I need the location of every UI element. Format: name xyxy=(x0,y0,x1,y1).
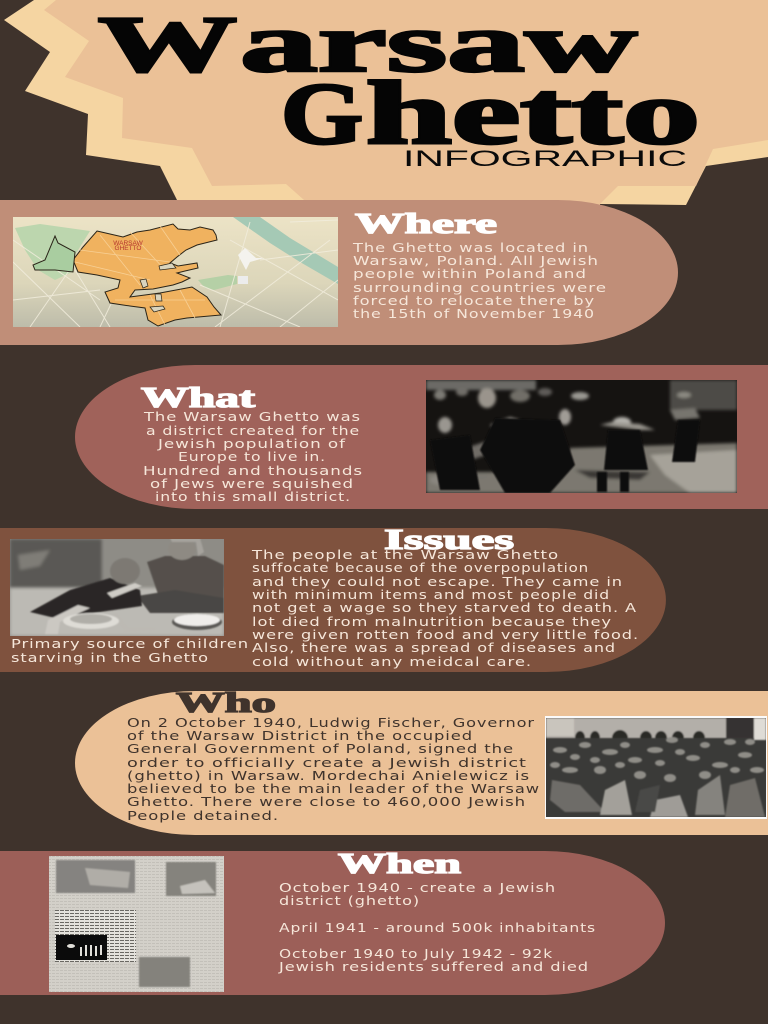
panel: what xyxy=(75,365,768,509)
text: issues: not get a wage so they starved to death. A xyxy=(252,600,637,615)
text: when timeline: April 1941 - around 500k inhabitants xyxy=(279,920,596,935)
text: when timeline: district (ghetto) xyxy=(279,893,420,908)
text: when timeline: Jewish residents suffered and died xyxy=(278,959,589,974)
panel: when xyxy=(0,849,665,995)
text: who: People detained. xyxy=(127,808,279,823)
panel: where xyxy=(0,200,678,345)
title xyxy=(98,0,700,171)
text: who: order to officially create a Jewish district xyxy=(127,755,527,770)
caption: primary source: Primary source of children xyxy=(11,636,249,651)
heading: issues: Issues xyxy=(384,525,514,556)
text: what: Jewish population of xyxy=(157,436,346,451)
text: what: Europe to live in. xyxy=(178,449,326,464)
text: issues: and they could not escape. They came in xyxy=(252,574,623,589)
map of the Warsaw Ghetto xyxy=(13,217,338,327)
text: where: forced to relocate there by xyxy=(353,293,595,308)
photo: starving children xyxy=(10,538,224,636)
text: where: Warsaw, Poland. All Jewish xyxy=(353,253,599,268)
text: where: The Ghetto was located in xyxy=(352,240,589,255)
ghetto district outline xyxy=(73,224,221,326)
header starburst: inner shape xyxy=(44,0,768,210)
text: who: On 2 October 1940, Ludwig Fischer, Governor xyxy=(127,715,535,730)
heading: what: What xyxy=(141,383,256,414)
text: where: surrounding countries were xyxy=(353,280,607,295)
text: issues: Also, there was a spread of diseases and xyxy=(252,640,616,655)
text: issues: were given rotten food and very little food. xyxy=(252,627,639,642)
text: issues: cold without any meidcal care. xyxy=(252,654,532,669)
text: who: General Government of Poland, signed the xyxy=(127,741,514,756)
map of the Warsaw Ghetto: GHETTO xyxy=(115,245,141,252)
text: issues xyxy=(251,547,639,669)
text: issues: lot died from malnutrition because they xyxy=(252,614,612,629)
caption: primary source: starving in the Ghetto xyxy=(11,650,209,665)
heading: where: Where xyxy=(355,208,497,240)
text: what xyxy=(143,409,363,504)
text: where xyxy=(352,240,607,321)
title: INFOGRAPHIC xyxy=(403,146,687,171)
text: who: believed to be the main leader of the Warsaw xyxy=(127,781,540,796)
panel: who xyxy=(75,688,768,835)
title: hetto xyxy=(366,64,700,163)
heading: when: When xyxy=(338,849,462,880)
header starburst: outer light shape xyxy=(4,0,768,210)
text: when timeline xyxy=(278,880,596,974)
text: issues: with minimum items and most people did xyxy=(252,587,610,602)
title: G xyxy=(281,66,363,163)
title: W xyxy=(98,1,237,89)
text: who: of the Warsaw District in the occupied xyxy=(127,728,473,743)
photo: crowd of detained people xyxy=(545,716,767,819)
text: what: Hundred and thousands xyxy=(143,463,363,478)
heading: who: Who xyxy=(176,688,276,719)
text: where: people within Poland and xyxy=(353,266,587,281)
text: issues: The people at the Warsaw Ghetto xyxy=(251,547,559,562)
map of the Warsaw Ghetto: WARSAW xyxy=(113,240,144,247)
green district outline xyxy=(33,236,75,272)
text: what: of Jews were squished xyxy=(150,476,354,491)
text: what: The Warsaw Ghetto was xyxy=(143,409,361,424)
photo: crowd forced from bunkers xyxy=(426,380,737,493)
text: where: the 15th of November 1940 xyxy=(353,306,595,321)
photo: newspaper clipping xyxy=(49,856,224,992)
text: what: into this small district. xyxy=(155,489,351,504)
text: who xyxy=(127,715,540,823)
text: what: a district created for the xyxy=(146,423,360,438)
caption: primary source xyxy=(11,636,249,665)
text: when timeline: October 1940 - create a Jewish xyxy=(279,880,556,895)
text: issues: suffocate because of the overpopulation xyxy=(252,560,589,575)
text: who: Ghetto. There were close to 460,000 Jewish xyxy=(127,794,526,809)
text: who: (ghetto) in Warsaw. Mordechai Anielewicz is xyxy=(127,768,530,783)
panel: issues xyxy=(0,525,666,672)
text: when timeline: October 1940 to July 1942 - 92k xyxy=(279,946,553,961)
